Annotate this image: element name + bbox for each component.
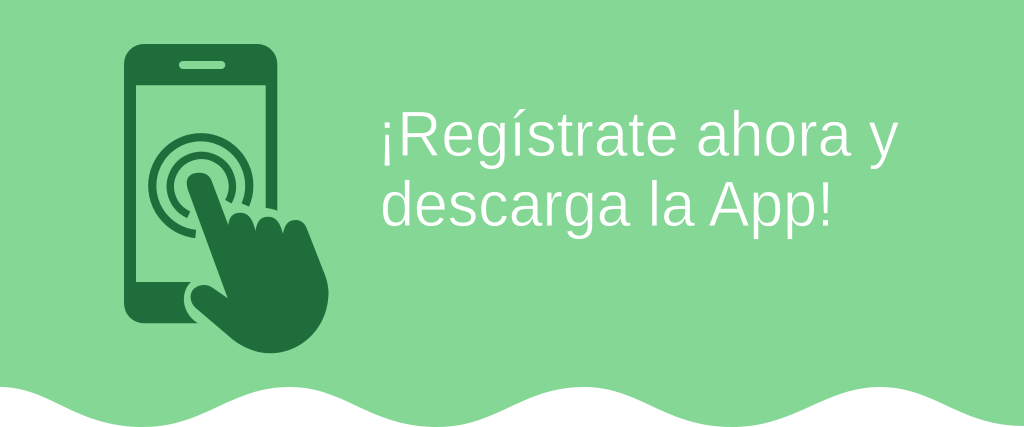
icon: phone with tapping hand: [124, 44, 329, 353]
icon: inner touch ring: [170, 155, 232, 215]
heading line 2: descarga la App!: [380, 168, 834, 240]
wave: white bottom edge: [0, 387, 1024, 427]
heading line 1: ¡Regístrate ahora y: [377, 98, 899, 170]
icon: hand: [187, 173, 329, 353]
icon: outer touch ring: [152, 137, 249, 234]
heading: call to action: [377, 98, 899, 240]
icon: phone body: [124, 44, 277, 323]
